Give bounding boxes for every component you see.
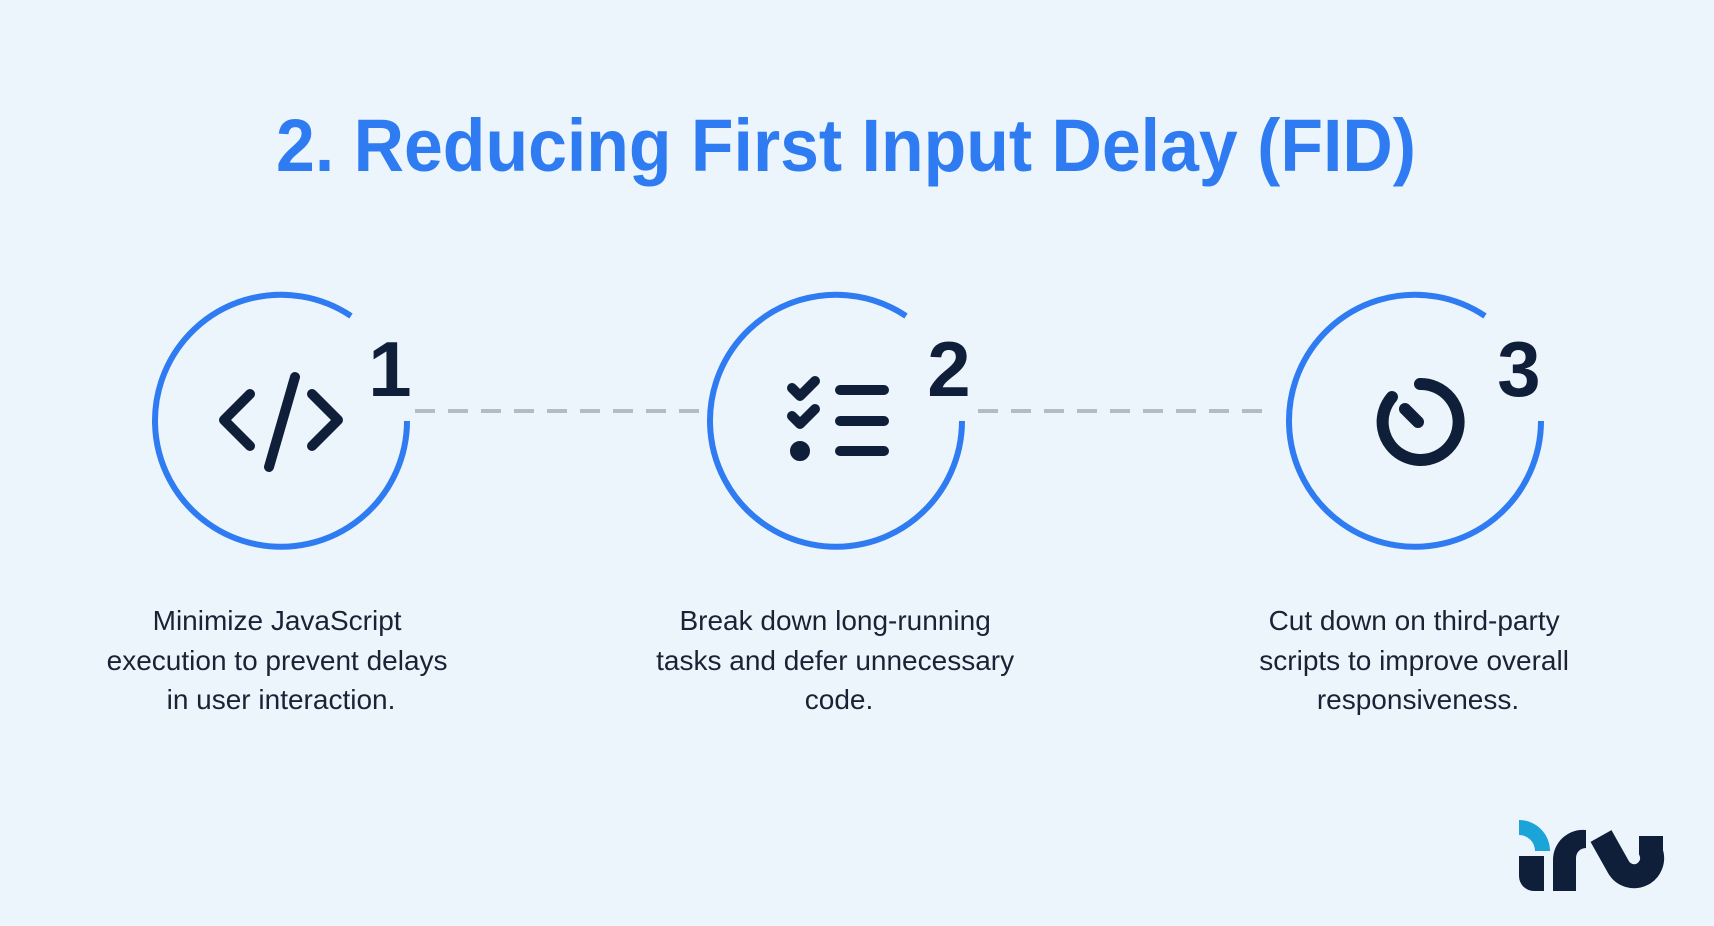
text 2: tasks and defer unnecessary bbox=[656, 645, 1014, 676]
text 3: Cut down on third-party bbox=[1269, 605, 1560, 636]
text 2: code. bbox=[805, 684, 873, 715]
icon: code bbox=[224, 377, 338, 467]
title: 2. Reducing First Input Delay (FID) bbox=[276, 104, 1416, 187]
text 3: scripts to improve overall bbox=[1259, 645, 1569, 676]
step 2 bbox=[710, 295, 971, 547]
step 1 bbox=[155, 295, 412, 547]
text 1: execution to prevent delays bbox=[107, 645, 448, 676]
text 1: Minimize JavaScript bbox=[153, 605, 402, 636]
number 2: 2 bbox=[927, 325, 971, 413]
logo bbox=[1519, 820, 1652, 891]
ring 3 bbox=[1289, 295, 1541, 547]
icon: timer bbox=[1383, 384, 1459, 460]
ring 2 bbox=[710, 295, 962, 547]
number 1: 1 bbox=[368, 325, 412, 413]
icon: checklist bbox=[792, 381, 884, 456]
ring 1 bbox=[155, 295, 407, 547]
text 3: responsiveness. bbox=[1317, 684, 1519, 715]
number 3: 3 bbox=[1497, 325, 1541, 413]
text 2: Break down long-running bbox=[679, 605, 991, 636]
text 1: in user interaction. bbox=[167, 684, 395, 715]
step 3 bbox=[1289, 295, 1541, 547]
dashed connector 1 bbox=[415, 409, 700, 413]
dashed connector 2 bbox=[978, 409, 1268, 413]
